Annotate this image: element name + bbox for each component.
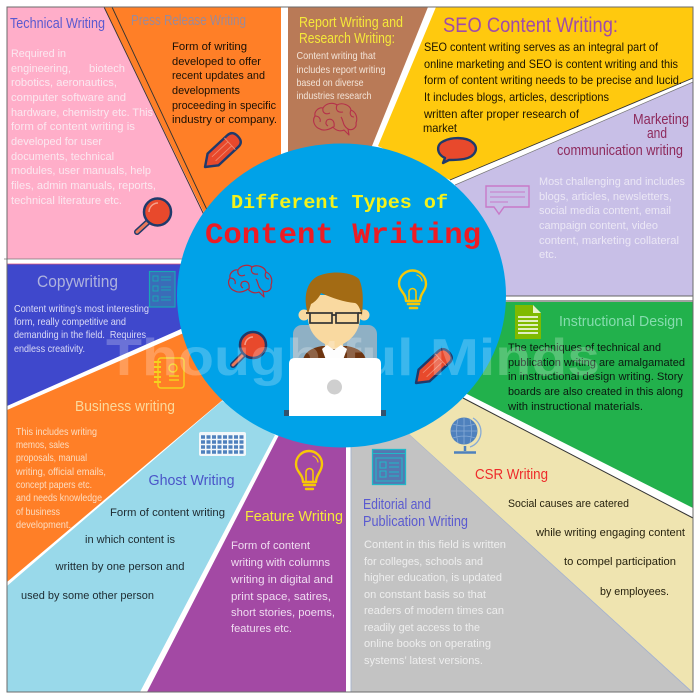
laptop base bbox=[284, 410, 386, 416]
body text: ghost writing: written by one person and bbox=[55, 561, 184, 573]
body text: feature writing: features etc. bbox=[231, 623, 292, 635]
body text: csr writing: to compel participation bbox=[564, 556, 676, 568]
body text: press release writing: Form of writing bbox=[172, 41, 247, 53]
heading: report and research writing: Research Writing: bbox=[299, 31, 395, 47]
body text: technical writing: form of content writing is bbox=[11, 121, 135, 133]
icon: pencil bbox=[411, 346, 454, 389]
body text: press release writing: proceeding in specific bbox=[172, 100, 276, 112]
icon: layout document bbox=[372, 450, 406, 484]
icon: globe bbox=[450, 418, 481, 452]
body text: press release writing: developed to offer bbox=[172, 56, 261, 68]
laptop bbox=[289, 358, 381, 416]
heading: report and research writing: Report Writing and bbox=[299, 15, 403, 31]
body text: business writing: concept papers etc. bbox=[16, 480, 92, 491]
panel: csr writing bbox=[408, 398, 693, 692]
body text: business writing: of business bbox=[16, 507, 60, 518]
body text: feature writing: Form of content bbox=[231, 540, 311, 552]
body text: ghost writing: in which content is bbox=[85, 534, 175, 546]
body text: technical writing: computer software and bbox=[11, 92, 126, 104]
heading: marketing and communication writing: communication writing bbox=[557, 143, 683, 159]
body text: seo bbox=[423, 40, 682, 135]
body text: press release writing: industry or company. bbox=[172, 114, 277, 126]
ears bbox=[298, 310, 370, 320]
icon: speech bubble bbox=[438, 138, 476, 163]
body text: feature writing: print space, satires, bbox=[231, 591, 331, 603]
chair bbox=[293, 325, 377, 367]
body text: report writing: industries research bbox=[296, 91, 372, 102]
body text: report writing: Content writing that bbox=[296, 51, 376, 62]
body text: marketing bbox=[539, 176, 685, 261]
body text: technical writing: Required in bbox=[11, 48, 66, 60]
icon: magnifier bbox=[137, 198, 171, 232]
body text: editorial: systems’ latest versions. bbox=[364, 655, 483, 667]
body text: business writing: development. bbox=[16, 520, 71, 531]
panel: instructional design bbox=[465, 301, 693, 508]
heading: csr writing: CSR Writing bbox=[475, 467, 548, 483]
heading: feature writing: Feature Writing bbox=[245, 509, 343, 525]
heading: marketing and communication writing: and bbox=[647, 126, 667, 142]
body text: csr writing: while writing engaging content bbox=[535, 527, 686, 539]
body text: technical writing: documents, technical bbox=[11, 151, 114, 163]
body text: marketing: social media content, email bbox=[539, 205, 671, 217]
heading: technical writing: Technical Writing bbox=[10, 16, 105, 32]
heading: business writing: Business writing bbox=[75, 399, 175, 415]
icon: message box bbox=[486, 186, 529, 214]
icon: document page bbox=[515, 305, 541, 339]
body text: business writing: and needs knowledge bbox=[16, 493, 102, 504]
body text: editorial: higher education, is updated bbox=[364, 572, 502, 584]
body text: marketing: content, marketing collateral bbox=[539, 235, 679, 247]
body text: instructional design bbox=[507, 342, 685, 413]
body text: seo: online marketing and SEO is content writing and this bbox=[424, 57, 678, 71]
body text: copywriting: form, really competitive and bbox=[14, 317, 126, 328]
body text: business writing bbox=[15, 427, 106, 531]
body text: csr writing bbox=[508, 498, 686, 598]
body text: editorial: online books on operating bbox=[364, 638, 491, 650]
heading: seo content writing: SEO Content Writing: bbox=[443, 14, 618, 37]
body text: marketing: Most challenging and includes bbox=[539, 176, 685, 188]
body text: editorial: Content in this field is written bbox=[364, 539, 506, 551]
body text: seo: SEO content writing serves as an integral part of bbox=[424, 40, 659, 54]
central circle bbox=[177, 144, 506, 448]
laptop logo bbox=[327, 380, 342, 394]
body text: instructional design: in instructional design writing. Story bbox=[508, 371, 683, 383]
icon: brain bbox=[314, 103, 357, 135]
body text: business writing: This includes writing bbox=[16, 427, 97, 438]
body text: instructional design: publication writing are amalgamated bbox=[508, 357, 685, 369]
jacket bbox=[303, 346, 366, 360]
body text: business writing: memos, sales bbox=[16, 440, 69, 451]
body text: copywriting: Content writing’s most interesting bbox=[14, 304, 149, 315]
panel: press release writing bbox=[104, 7, 281, 215]
heading: ghost writing: Ghost Writing bbox=[148, 473, 234, 489]
body text: seo: form of content writing needs to be precise and lucid. bbox=[424, 73, 682, 87]
heading: report and research writing bbox=[299, 15, 403, 47]
body text: business writing: writing, official emails, bbox=[15, 467, 106, 478]
body text: technical writing: files, admin manuals, reports, bbox=[11, 180, 156, 192]
body text: press release writing: developments bbox=[172, 85, 240, 97]
body text: ghost writing: used by some other person bbox=[21, 590, 154, 602]
panel: business writing bbox=[7, 332, 225, 582]
heading: editorial and publication writing: Editorial and bbox=[363, 497, 431, 513]
icon: light bulb bbox=[399, 270, 426, 308]
icon: keyboard bbox=[199, 432, 246, 456]
face bbox=[308, 295, 360, 349]
body text: marketing: etc. bbox=[539, 249, 557, 261]
body text: seo: It includes blogs, articles, descriptions bbox=[424, 90, 609, 104]
body text: editorial: readily get access to the bbox=[364, 622, 480, 634]
icon: notebook bbox=[154, 358, 184, 388]
panel: report and research writing bbox=[288, 7, 428, 170]
panel: ghost writing bbox=[7, 401, 275, 692]
panel: technical writing bbox=[7, 7, 205, 259]
body text: technical writing: modules, user manuals, help bbox=[11, 165, 151, 177]
panel: copywriting bbox=[7, 264, 190, 406]
body text: ghost writing: Form of content writing bbox=[110, 507, 225, 519]
icon: list document bbox=[150, 272, 175, 307]
body text: seo: written after proper research of bbox=[423, 107, 580, 121]
body text: technical writing: biotech bbox=[89, 63, 125, 75]
body text: editorial: on constant basis so that bbox=[364, 589, 487, 601]
body text: technical writing: engineering, bbox=[11, 63, 71, 75]
heading: press release writing: Press Release Writing bbox=[131, 13, 246, 29]
illustration: person at laptop bbox=[284, 272, 386, 416]
body text: editorial: readers of modern times can bbox=[364, 605, 504, 617]
body text: instructional design: The techniques of technical and bbox=[508, 342, 661, 354]
body text: csr writing: Social causes are catered bbox=[508, 498, 629, 510]
hair bbox=[306, 272, 363, 316]
body text: instructional design: boards are also created in this along bbox=[508, 386, 683, 398]
body text: technical writing: robotics, aeronautics, bbox=[11, 77, 117, 89]
body text: press release writing bbox=[172, 41, 277, 126]
body text: marketing: campaign content, video bbox=[539, 220, 658, 232]
icon: pencil bbox=[200, 130, 243, 173]
icon: magnifier bbox=[233, 332, 266, 365]
body text: seo: market bbox=[423, 121, 458, 135]
title: content writing: Content Writing bbox=[205, 219, 481, 253]
body text: editorial: for colleges, schools and bbox=[364, 556, 483, 568]
icon: light bulb bbox=[296, 451, 322, 489]
heading: editorial and publication writing: Publication Writing bbox=[363, 514, 468, 530]
body text: copywriting bbox=[14, 304, 149, 355]
body text: report writing bbox=[296, 51, 386, 102]
panel: editorial and publication writing bbox=[351, 433, 693, 692]
glasses bbox=[306, 313, 362, 323]
body text: feature writing: short stories, poems, bbox=[231, 607, 335, 619]
icon: brain bbox=[229, 265, 272, 297]
body text: ghost writing bbox=[21, 507, 225, 602]
body text: csr writing: by employees. bbox=[600, 586, 669, 598]
body text: feature writing bbox=[230, 540, 335, 635]
heading: editorial and publication writing bbox=[363, 497, 468, 530]
body text: instructional design: with instructional materials. bbox=[507, 401, 643, 413]
body text: report writing: includes report writing bbox=[296, 65, 386, 76]
panel: seo content writing bbox=[378, 7, 693, 180]
heading: copywriting: Copywriting bbox=[37, 273, 118, 291]
body text: marketing: blogs, articles, newsletters, bbox=[539, 191, 672, 203]
body text: copywriting: demanding in the field. Requires bbox=[14, 330, 146, 341]
heading: marketing and communication writing bbox=[557, 112, 689, 159]
heading: instructional design: Instructional Design bbox=[559, 314, 683, 330]
body text: technical writing bbox=[11, 48, 156, 207]
body text: copywriting: endless creativity. bbox=[14, 344, 85, 355]
body text: technical writing: developed for user bbox=[11, 136, 102, 148]
body text: report writing: based on diverse bbox=[296, 78, 364, 89]
panel: feature writing bbox=[147, 435, 346, 692]
body text: business writing: proposals, manual bbox=[16, 453, 87, 464]
heading: marketing and communication writing: Marketing bbox=[633, 112, 689, 128]
title: different types of: Different Types of bbox=[231, 192, 448, 214]
watermark: Thoughtful Minds bbox=[106, 329, 600, 387]
body text: technical writing: technical literature etc. bbox=[11, 195, 122, 207]
body text: editorial bbox=[364, 539, 506, 667]
body text: technical writing: hardware, chemistry etc. This bbox=[11, 107, 153, 119]
body text: press release writing: recent updates and bbox=[172, 70, 265, 82]
body text: feature writing: writing in digital and bbox=[230, 574, 333, 586]
collar bbox=[322, 345, 347, 360]
body text: feature writing: writing with columns bbox=[230, 557, 330, 569]
panel: marketing and communication writing bbox=[440, 82, 693, 296]
